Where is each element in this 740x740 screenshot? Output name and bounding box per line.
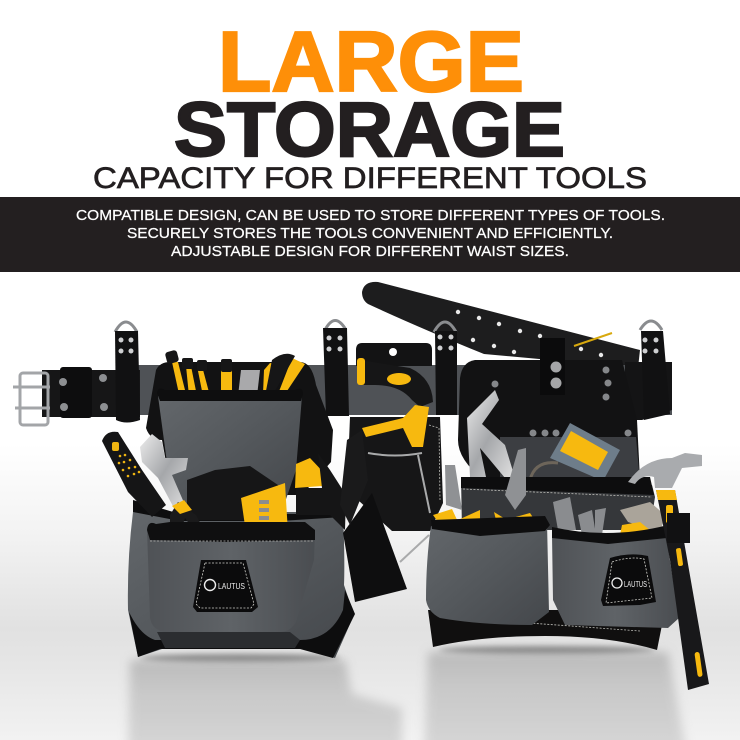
lower bag tools xyxy=(102,432,346,533)
yellow plier handles xyxy=(433,509,538,528)
riveted strap xyxy=(492,338,632,436)
right front pocket xyxy=(552,535,679,628)
upper pouch xyxy=(158,396,302,505)
pliers xyxy=(170,502,205,533)
backing panel xyxy=(458,360,640,480)
water pump pliers xyxy=(467,390,515,478)
floor reflections xyxy=(128,646,688,740)
hammer head xyxy=(628,453,702,488)
left tool bag xyxy=(102,350,355,658)
description text: SECURELY STORES THE TOOLS CONVENIENT AND EFFICIENTLY. xyxy=(127,225,613,242)
upper pouch tools xyxy=(165,350,305,397)
centre panel xyxy=(347,343,443,531)
belt tail xyxy=(362,282,640,368)
screwdriver xyxy=(102,432,166,517)
right tool bag xyxy=(426,338,709,690)
centre holster and hacksaw xyxy=(340,343,443,602)
yellow tape tool xyxy=(295,458,326,488)
heading word: LARGE: LARGE xyxy=(218,15,524,110)
label patch with logo xyxy=(601,554,656,606)
label patch with logo: LAUTUS xyxy=(218,581,245,591)
subheading: CAPACITY FOR DIFFERENT TOOLS xyxy=(93,162,647,195)
grey inner panel xyxy=(500,437,640,482)
hammer xyxy=(628,453,709,690)
adjustable wrench xyxy=(140,434,188,510)
left front pocket xyxy=(426,522,549,625)
hammer handle xyxy=(656,490,709,690)
tools in pockets xyxy=(433,448,665,535)
back pocket of lower bag xyxy=(128,512,354,658)
back row rim xyxy=(461,477,655,530)
belt loops with D rings xyxy=(115,320,670,422)
left hanging holster xyxy=(343,493,407,602)
description text: ADJUSTABLE DESIGN FOR DIFFERENT WAIST SIZES. xyxy=(171,243,569,260)
heading word: STORAGE: STORAGE xyxy=(174,87,565,173)
front pocket xyxy=(147,530,315,632)
allen keys and bits xyxy=(187,466,278,520)
long nose pliers xyxy=(505,448,526,510)
spanners xyxy=(553,497,606,535)
box of screws xyxy=(550,423,620,481)
heading xyxy=(93,15,647,195)
description band xyxy=(0,197,740,272)
upper pouch backing xyxy=(146,362,333,495)
description text xyxy=(76,207,665,260)
black bag base xyxy=(428,610,665,650)
label patch with logo xyxy=(193,560,258,612)
description text: COMPATIBLE DESIGN, CAN BE USED TO STORE DIFFERENT TYPES OF TOOLS. xyxy=(76,207,665,224)
buckle xyxy=(13,373,50,425)
main belt xyxy=(42,362,672,420)
hex keys xyxy=(620,502,665,533)
hammer loop xyxy=(667,513,690,543)
label patch with logo: LAUTUS xyxy=(624,580,647,589)
product photo: tool belt xyxy=(13,282,709,690)
yellow bit holder xyxy=(241,483,288,533)
hacksaw xyxy=(357,358,433,562)
